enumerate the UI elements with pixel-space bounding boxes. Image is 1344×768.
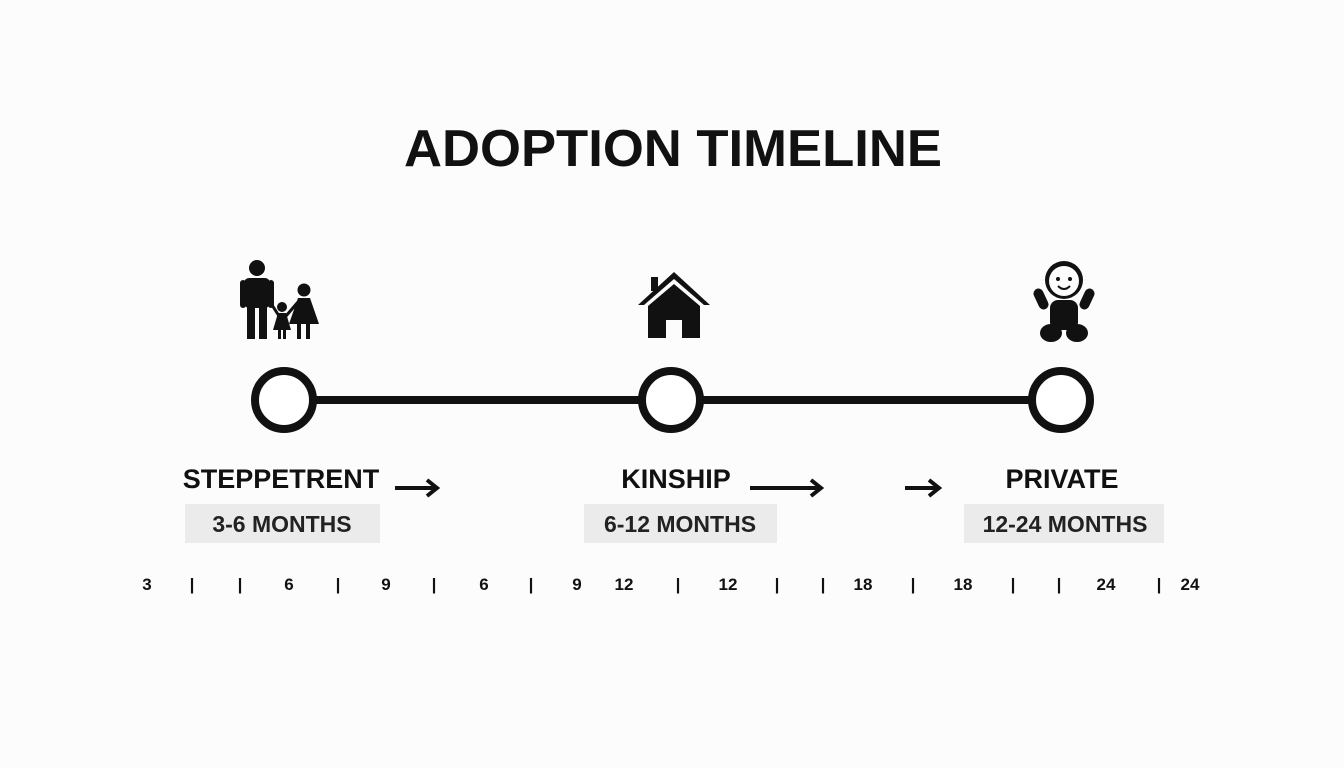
month axis: 24 <box>1097 575 1116 594</box>
month axis: | <box>336 575 340 594</box>
label: private: PRIVATE <box>1005 464 1119 494</box>
arrow 1 <box>395 480 437 496</box>
month axis: | <box>1157 575 1161 594</box>
node: private <box>1032 371 1090 429</box>
node: kinship <box>642 371 700 429</box>
label: private <box>964 464 1164 543</box>
icon: family <box>240 260 319 339</box>
icon: house <box>638 272 710 338</box>
month axis: | <box>775 575 779 594</box>
icon: baby <box>1032 261 1096 342</box>
label: kinship: 6-12 MONTHS <box>604 511 756 537</box>
month axis: 9 <box>572 575 582 594</box>
month axis: | <box>238 575 242 594</box>
month axis: | <box>676 575 680 594</box>
month axis: 12 <box>615 575 633 594</box>
label: steppetrent: STEPPETRENT <box>183 464 380 494</box>
timeline line <box>284 396 1061 404</box>
month axis: | <box>529 575 533 594</box>
month axis: 12 <box>719 575 737 594</box>
month axis: | <box>821 575 825 594</box>
month axis: 18 <box>854 575 872 594</box>
arrow 3 <box>905 480 939 496</box>
title: ADOPTION TIMELINE <box>404 120 942 178</box>
arrow 2 <box>750 480 821 496</box>
node: steppetrent <box>255 371 313 429</box>
month axis: 6 <box>479 575 489 594</box>
label: private: 12-24 MONTHS <box>983 511 1147 537</box>
label: kinship <box>584 464 777 543</box>
month axis: 18 <box>954 575 972 594</box>
month axis: | <box>911 575 915 594</box>
month axis <box>142 575 1200 594</box>
month axis: | <box>1011 575 1015 594</box>
month axis: 9 <box>381 575 391 594</box>
month axis: | <box>190 575 194 594</box>
month axis: | <box>432 575 436 594</box>
month axis: 24 <box>1181 575 1200 594</box>
month axis: 3 <box>142 575 152 594</box>
label: steppetrent: 3-6 MONTHS <box>212 511 352 537</box>
month axis: | <box>1057 575 1061 594</box>
label: kinship: KINSHIP <box>621 464 731 494</box>
month axis: 6 <box>284 575 294 594</box>
label: steppetrent <box>183 464 380 543</box>
